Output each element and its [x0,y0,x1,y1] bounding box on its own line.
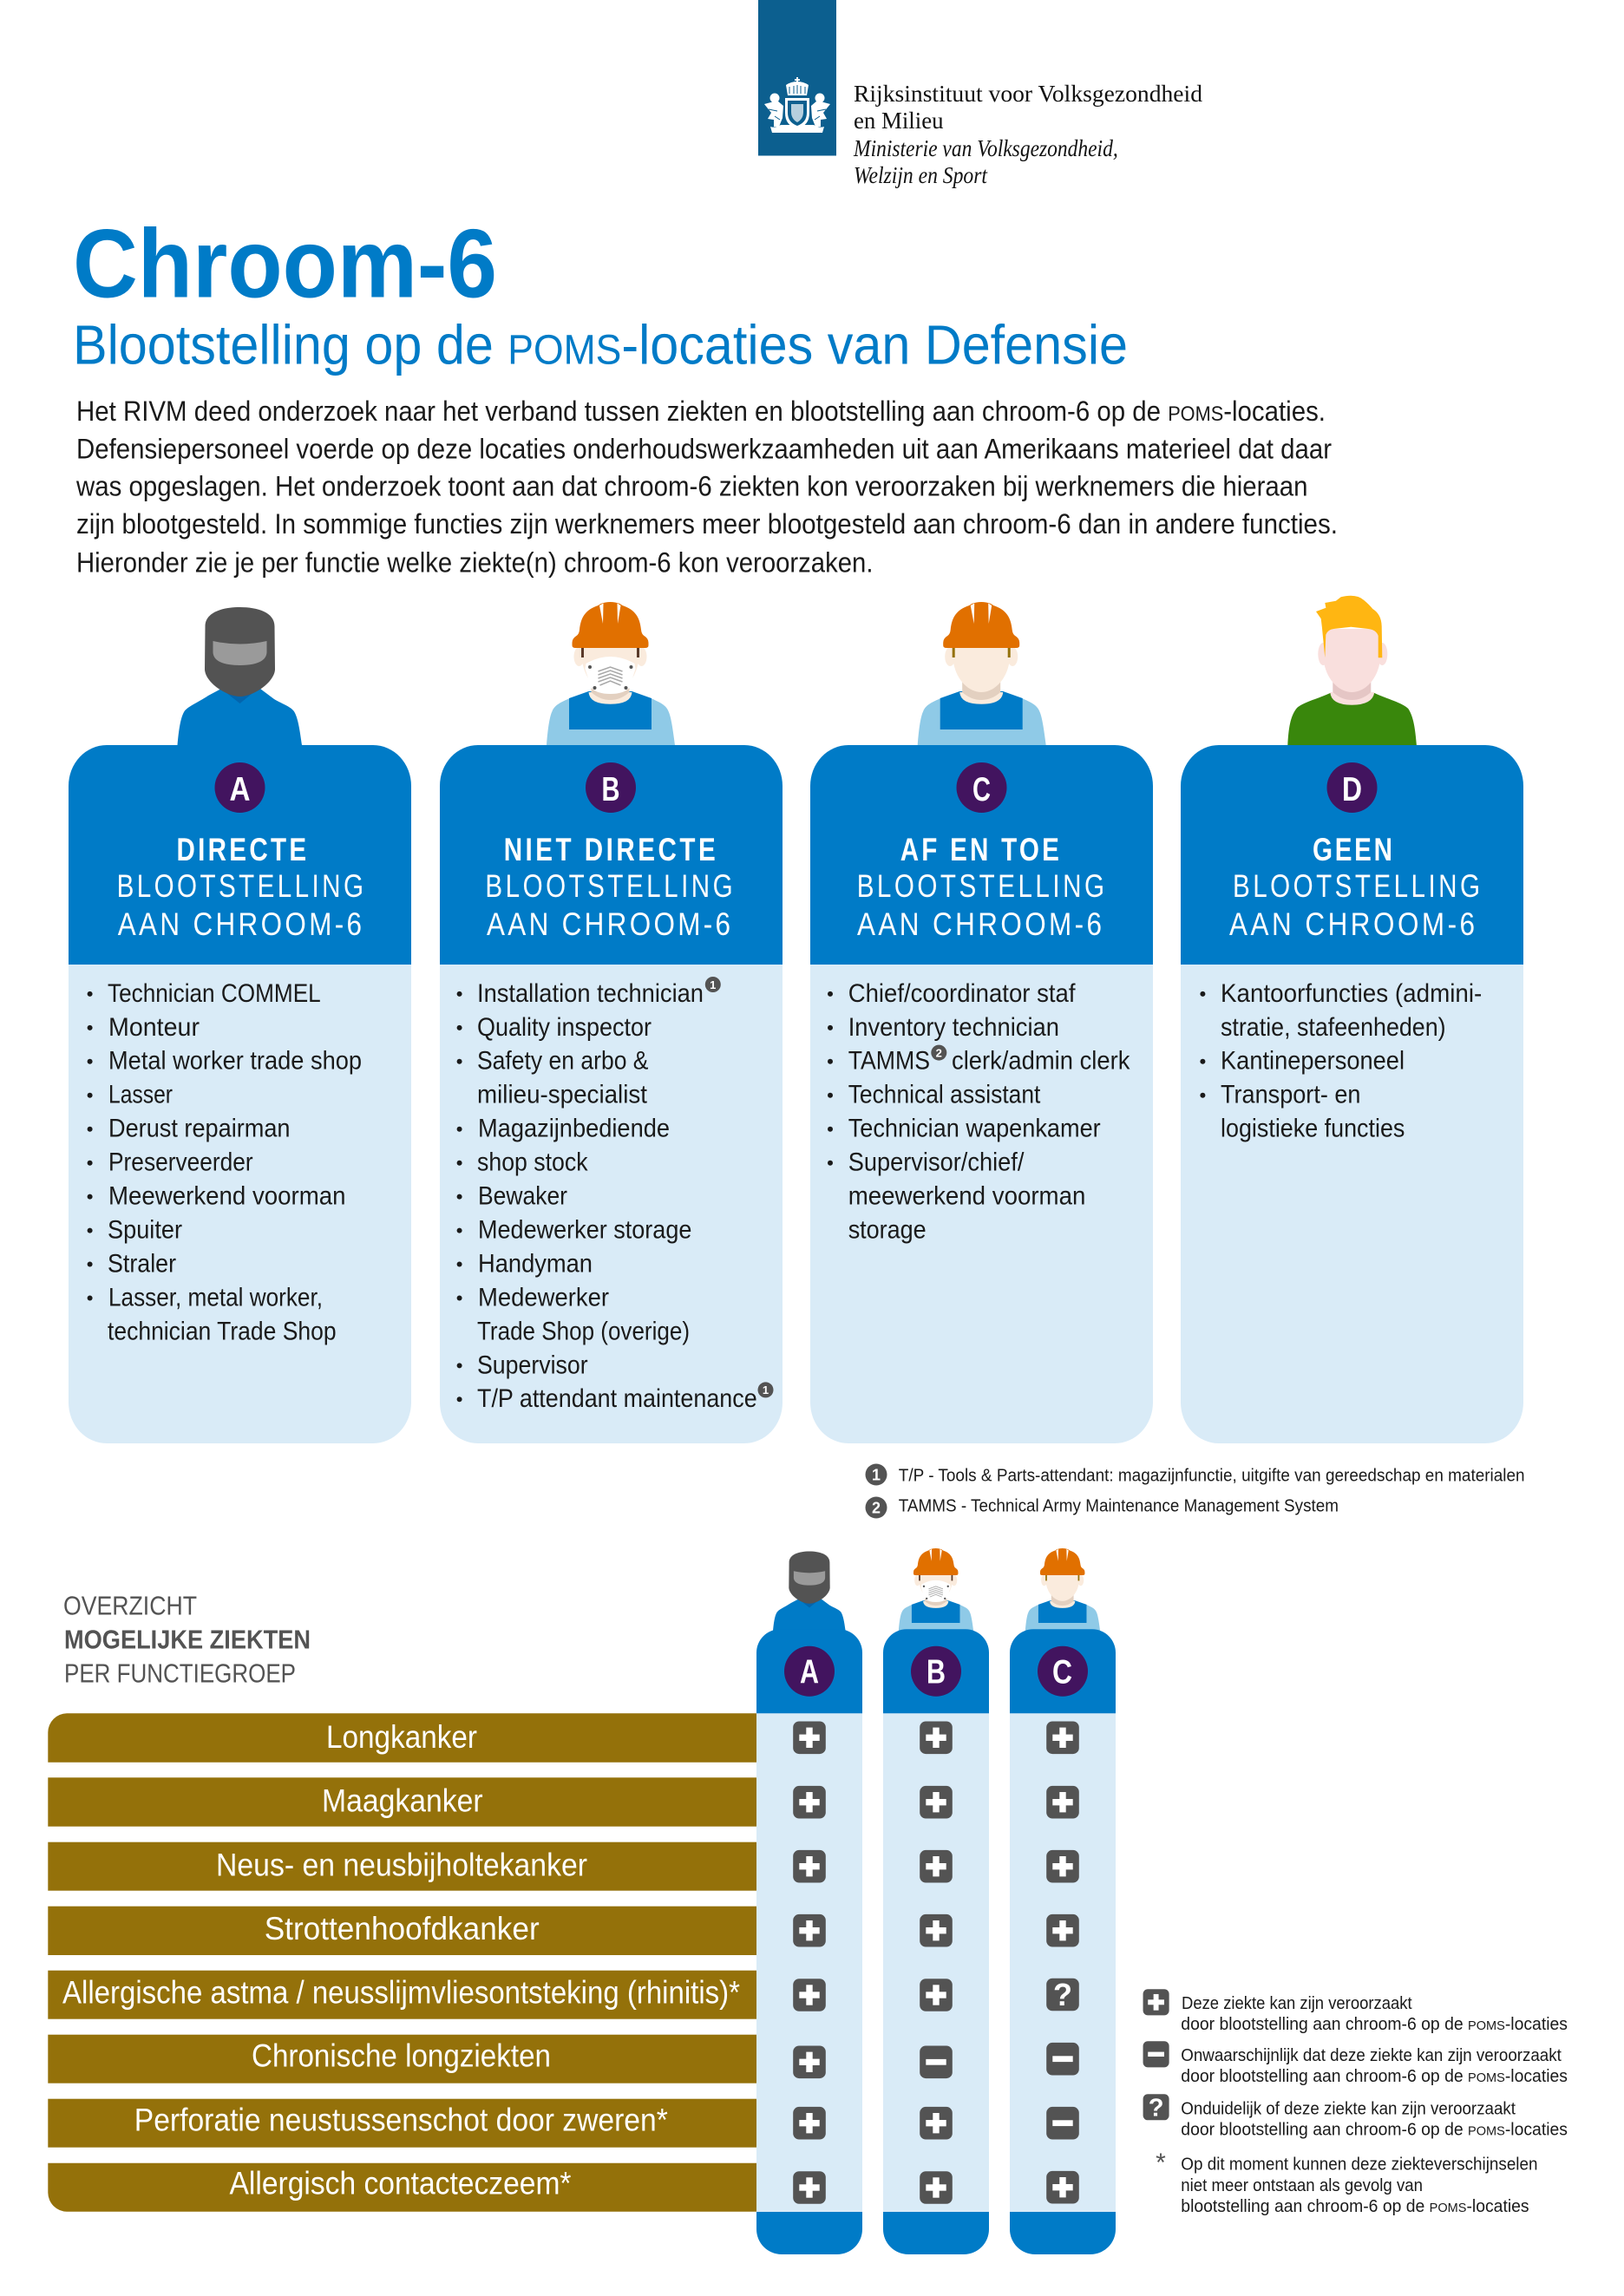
list B: Medewerker storage [478,1216,691,1244]
legend text: question mark: door blootstelling aan chroom-6 op de POMS-locaties [1181,2121,1568,2140]
column C header [1010,1629,1116,1713]
legend text: question mark [1181,2100,1568,2140]
list A: Lasser [108,1081,173,1109]
footnote marker 2: 2 [936,1046,942,1059]
column C background [1010,1713,1116,2216]
heading B: BLOOTSTELLING [485,869,733,905]
heading D [1229,833,1480,943]
legend text: question mark: Onduidelijk of deze ziekte kan zijn veroorzaakt [1181,2100,1516,2119]
list C: TAMMS [848,1047,930,1076]
overview heading [63,1591,311,1688]
disease row: Chronische longziekten [48,2035,756,2083]
list C: storage [848,1216,927,1244]
overview heading: PER FUNCTIEGROEP [64,1658,296,1688]
icon: plus [920,1786,953,1818]
panel D body [1181,965,1523,1443]
icon: minus [1046,2043,1079,2075]
heading D: GEEN [1313,833,1392,868]
icon: plus [920,1914,953,1946]
logo text: Welzijn en Sport [854,162,988,188]
list B: Medewerker [478,1283,609,1312]
badge D [1327,762,1378,813]
footnote marker 1 [758,1382,774,1397]
heading A: AAN CHROOM-6 [118,907,362,943]
list B: milieu-specialist [477,1081,647,1109]
logo text: Rijksinstituut voor Volksgezondheid [854,81,1202,107]
list B: Trade Shop (overige) [477,1317,690,1345]
column C footer [1010,2212,1116,2254]
badge D: D [1342,771,1362,808]
icon: plus [920,2171,953,2204]
footnotes: TAMMS - Technical Army Maintenance Management System [899,1496,1339,1515]
icon: plus [1046,1914,1079,1946]
disease row: Strottenhoofdkanker [48,1907,756,1955]
footnotes: T/P - Tools & Parts-attendant: magazijnfunctie, uitgifte van gereedschap en materialen [899,1466,1525,1485]
legend text: minus: Onwaarschijnlijk dat deze ziekte kan zijn veroorzaakt [1181,2046,1562,2065]
disease row: Allergisch contacteczeem: Allergisch contacteczeem* [229,2165,571,2201]
legend text: asterisk: Op dit moment kunnen deze ziekteverschijnselen [1181,2155,1537,2175]
icon: plus [920,1979,953,2011]
legend text: plus [1181,1994,1568,2034]
legend text: asterisk: blootstelling aan chroom-6 op de POMS-locaties [1181,2197,1529,2216]
panel: B niet directe blootstelling [440,602,783,1443]
heading C: AAN CHROOM-6 [857,907,1102,943]
icon: welder with mask [177,607,302,745]
column B [883,1548,989,2254]
icon: question mark: ? [1053,1977,1072,2012]
icon: minus [1046,2107,1079,2139]
legend icon: question mark: ? [1149,2094,1163,2122]
matrix icons column A [793,1721,826,2204]
column A background [756,1713,862,2216]
disease row: Perforatie neustussenschot: Perforatie neustussenschot door zweren* [134,2103,668,2138]
list C: Inventory technician [848,1013,1059,1042]
column B background [883,1713,989,2216]
disease row: Chronische longziekten: Chronische longziekten [252,2038,551,2074]
heading C: BLOOTSTELLING [857,869,1104,905]
icon: plus [793,1786,826,1818]
list C: Supervisor/chief/ [848,1148,1025,1177]
panel D header [1181,745,1523,965]
list A: Spuiter [108,1216,182,1244]
matrix icons column B [920,1721,953,2204]
icon: plus [793,1914,826,1946]
list C: Technician wapenkamer [848,1115,1101,1143]
icon: plus [793,1850,826,1882]
logo text: Ministerie van Volksgezondheid, [853,135,1118,161]
badge B: B [602,771,619,808]
icon: plus [1046,1786,1079,1818]
legend text: plus: door blootstelling aan chroom-6 op de POMS-locaties [1181,2015,1568,2034]
disease row: Perforatie neustussenschot [48,2099,756,2148]
footnote marker 1 [705,977,721,992]
icon: worker with helmet and dust mask [547,602,675,745]
badge B: B [927,1654,946,1691]
list A: Technician COMMEL [108,979,321,1008]
icon: question mark [1046,1977,1079,2012]
panel C header [810,745,1153,965]
icon: plus [793,1979,826,2011]
column A header [756,1629,862,1713]
list A: Straler [108,1249,176,1278]
disease row: Allergische astma [48,1971,756,2019]
footnotes [866,1464,1525,1518]
disease row: Allergisch contacteczeem [48,2163,756,2212]
badge B [586,762,636,813]
disease row: Maagkanker [48,1777,756,1827]
footnote marker 1: 1 [710,978,716,991]
list B: T/P attendant maintenance [477,1384,757,1413]
legend text: plus: Deze ziekte kan zijn veroorzaakt [1182,1994,1412,2013]
heading D: AAN CHROOM-6 [1229,907,1475,943]
badge A [784,1646,835,1697]
list B: Supervisor [477,1351,588,1379]
intro text block: Defensiepersoneel voerde op deze locaties onderhoudswerkzaamheden uit aan Amerikaans materieel dat daar [76,433,1332,464]
heading A [117,833,363,943]
list B: Quality inspector [477,1013,652,1042]
list B: Magazijnbediende [478,1115,670,1143]
icon: plus [793,2045,826,2078]
logo text: en Milieu [854,108,944,134]
icon: plus [1046,1721,1079,1754]
icon: welder small [773,1551,846,1632]
heading C [857,833,1104,943]
subtitle: Blootstelling op de POMS-locaties van Defensie [73,313,1128,376]
list B: shop stock [477,1148,588,1177]
list D: Transport- en [1221,1081,1360,1109]
overview heading: MOGELIJKE ZIEKTEN [64,1625,311,1655]
disease row: Longkanker [48,1713,756,1763]
panel B body [440,965,783,1443]
list A: Lasser, metal worker, [108,1283,323,1312]
heading B: NIET DIRECTE [504,833,716,868]
badge C: C [1052,1654,1072,1691]
panel: A directe blootstelling [69,607,411,1443]
list A [88,979,362,1345]
disease row: Allergische astma: Allergische astma / neusslijmvliesontsteking (rhinitis)* [62,1974,740,2010]
footnotes: 1 [872,1466,881,1483]
list C: clerk/admin clerk [952,1047,1130,1076]
list D: stratie, stafeenheden) [1221,1013,1446,1042]
column B footer [883,2212,989,2254]
disease row: Maagkanker: Maagkanker [322,1783,483,1819]
list B: Bewaker [478,1181,567,1211]
intro text block: was opgeslagen. Het onderzoek toont aan dat chroom-6 ziekten kon veroorzaken bij werknemers die hieraan [75,471,1308,502]
disease row: Strottenhoofdkanker: Strottenhoofdkanker [265,1911,540,1946]
list B: Installation technician [477,979,704,1008]
legend text: minus: door blootstelling aan chroom-6 op de POMS-locaties [1181,2067,1568,2086]
list B [457,977,774,1413]
icon: worker with dust mask small [899,1548,973,1632]
list A: technician Trade Shop [108,1317,337,1345]
panel A header [69,745,411,965]
list B: Safety en arbo & [477,1047,649,1076]
badge C [1038,1646,1088,1697]
list A: Metal worker trade shop [108,1047,362,1076]
intro text block [75,396,1338,578]
footnotes: 2 [872,1499,881,1516]
list C: Technical assistant [848,1081,1040,1109]
panel: D geen blootstelling [1181,596,1523,1443]
list A: Derust repairman [108,1115,290,1143]
heading C: AF EN TOE [900,833,1059,868]
icon: plus [1046,2171,1079,2203]
legend icon: plus [1143,1989,1169,2015]
title: Chroom-6 [73,210,497,318]
icon: plus [1046,1850,1079,1882]
heading A: BLOOTSTELLING [117,869,363,905]
list A: Preserveerder [108,1148,253,1177]
list C: meewerkend voorman [848,1181,1085,1211]
icon: plus [920,2107,953,2139]
icon: minus [920,2045,953,2078]
legend [1143,1989,1568,2216]
legend asterisk: * [1156,2149,1166,2177]
column A [756,1551,862,2254]
icon: plus [793,2171,826,2204]
list A: Monteur [108,1013,200,1042]
footnote marker 1: 1 [763,1383,769,1397]
column C [1010,1548,1116,2254]
legend text: asterisk [1181,2155,1537,2216]
matrix icons column C [1046,1721,1079,2203]
list C: Chief/coordinator staf [848,979,1076,1008]
list D [1200,979,1482,1143]
badge A [215,762,265,813]
panel B header [440,745,783,965]
icon: worker small [1025,1548,1100,1632]
heading A: DIRECTE [177,833,306,868]
badge C [956,762,1006,813]
intro text block: zijn blootgesteld. In sommige functies zijn werknemers meer blootgesteld aan chroom-6 dan in andere functies. [76,508,1338,540]
legend icon: question mark [1143,2094,1169,2122]
panel: C af en toe blootstelling [810,602,1153,1443]
icon: plus [920,1721,953,1754]
list B: Handyman [478,1249,593,1278]
badge B [911,1646,961,1697]
intro text block: Hieronder zie je per functie welke ziekte(n) chroom-6 kon veroorzaken. [76,546,873,578]
legend icon: minus [1143,2041,1169,2067]
badge C: C [972,771,991,808]
panel C body [810,965,1153,1443]
disease row: Longkanker: Longkanker [326,1719,477,1755]
icon: plus [793,1721,826,1754]
column A footer [756,2212,862,2254]
heading B: AAN CHROOM-6 [487,907,730,943]
list A: Meewerkend voorman [108,1181,345,1211]
icon: plus [920,1850,953,1882]
footnote marker 2 [931,1045,946,1061]
logo: Rijksoverheid ribbon with crest [758,0,836,156]
badge A: A [229,771,250,808]
disease row: Neus- en neusbijholtekanker [48,1842,756,1891]
logo text [853,81,1202,188]
list D: Kantoorfuncties (admini- [1221,979,1482,1008]
heading B [485,833,733,943]
legend text: asterisk: niet meer ontstaan als gevolg van [1181,2176,1423,2195]
disease row: Neus- en neusbijholtekanker: Neus- en neusbijholtekanker [216,1847,587,1882]
badge A: A [800,1654,819,1691]
legend text: minus [1181,2046,1568,2086]
intro text block: Het RIVM deed onderzoek naar het verband tussen ziekten en blootstelling aan chroom-6 op de POMS-locaties. [76,396,1326,427]
list D: logistieke functies [1221,1115,1405,1143]
icon: plus [793,2107,826,2139]
list C [828,979,1130,1244]
overview heading: OVERZICHT [63,1591,197,1621]
icon: worker with helmet [918,602,1046,745]
icon: office worker with blond hair [1287,596,1417,745]
panel A body [69,965,411,1443]
list D: Kantinepersoneel [1221,1047,1405,1076]
heading D: BLOOTSTELLING [1233,869,1480,905]
column B header [883,1629,989,1713]
